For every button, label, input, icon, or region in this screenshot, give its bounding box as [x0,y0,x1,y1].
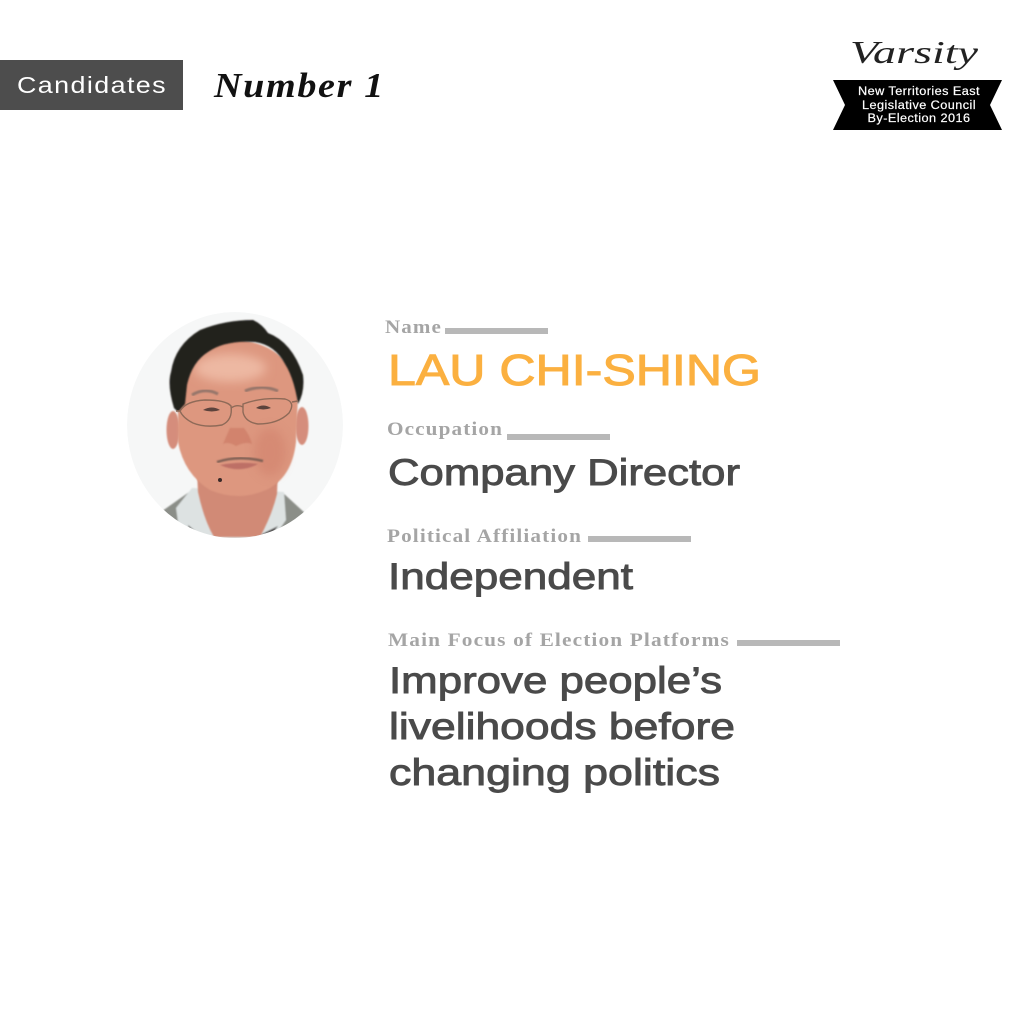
face [178,340,298,496]
neck [196,479,278,538]
logo: Varsity signature: Varsity [850,34,979,70]
hair [170,320,303,412]
field: political affiliation [387,526,691,597]
forehead highlight [194,354,266,382]
cheek shading [256,430,284,474]
mole [218,478,222,482]
label: Name [385,317,442,338]
candidate number heading: Number 1 [213,66,385,105]
label: Occupation [387,419,503,440]
label: Political Affiliation [387,526,582,547]
candidates tag: Candidates [17,72,167,98]
eyes [203,408,220,412]
jacket and shirt [158,488,306,540]
value [389,660,735,793]
Varsity logo and by-election ribbon [833,34,1002,130]
ribbon banner: Legislative Council [862,100,976,112]
field: main focus of election platforms [388,630,840,793]
value: livelihoods before [389,706,735,747]
field: name [385,317,761,395]
nose [223,428,252,446]
ribbon banner: By-Election 2016 [868,113,970,125]
ears [166,411,180,449]
field: occupation [387,419,740,493]
portrait photo of candidate [127,312,343,540]
eyebrows [192,391,218,395]
moustache and mouth [217,458,263,462]
value: Improve people’s [389,660,722,701]
value: LAU CHI-SHING [388,346,761,395]
value: Company Director [388,452,740,493]
ribbon banner: New Territories East [858,86,980,98]
label: Main Focus of Election Platforms [388,630,730,651]
ribbon banner [833,80,1002,130]
candidates tag [0,60,183,110]
value: Independent [388,556,634,597]
glasses [176,399,298,426]
value: changing politics [389,752,720,793]
